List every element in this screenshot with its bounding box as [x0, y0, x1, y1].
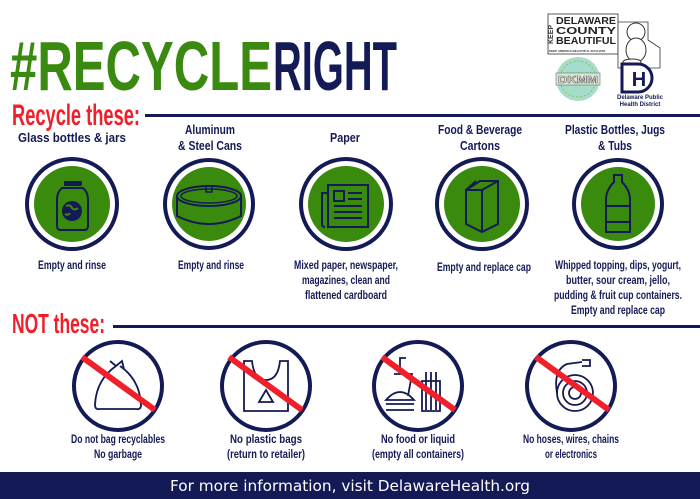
logo: Keep Delaware County Beautiful: KEEP AMERICA BEAUTIFUL AFFILIATE: [549, 49, 605, 53]
item: cans: & Steel Cans: [178, 138, 242, 153]
heading: NOT these: NOT these:: [12, 308, 105, 339]
item: cans: Empty and rinse: [178, 258, 244, 272]
title: #RECYCLE: [10, 27, 272, 105]
item: paper: Mixed paper, newspaper,: [294, 258, 398, 272]
logo: Delaware Public Health District: Health District: [620, 102, 660, 108]
item: plastic: & Tubs: [598, 138, 632, 153]
item: cartons: Empty and replace cap: [437, 260, 531, 274]
item: no hoses: or electronics: [545, 447, 597, 461]
item: no bagging: Do not bag recyclables: [71, 432, 165, 446]
item: no hoses: [523, 342, 619, 461]
item: cartons: [437, 122, 531, 274]
item: glass: Empty and rinse: [38, 258, 106, 272]
footer: [0, 472, 700, 499]
heading: Recycle these: Recycle these:: [12, 99, 140, 132]
logo: Delaware Public Health District: H: [632, 69, 646, 91]
item: no bagging: No garbage: [94, 447, 142, 461]
logo: DKMM: [556, 57, 600, 101]
item: no hoses: No hoses, wires, chains: [523, 432, 619, 446]
logo: Keep Delaware County Beautiful: DELAWARE: [556, 16, 616, 27]
item: no plastic bags: (return to retailer): [227, 447, 305, 461]
item: cartons: Food & Beverage: [438, 122, 522, 137]
item: plastic: Empty and replace cap: [571, 303, 665, 317]
heading: Recycle these: [12, 99, 700, 132]
logo: Delaware Public Health District: Delaware Public: [617, 95, 664, 101]
item: no plastic bags: No plastic bags: [230, 432, 302, 446]
item: glass: [18, 130, 126, 272]
recycle items: [18, 122, 682, 317]
item: cans: Aluminum: [185, 122, 235, 137]
logo: Keep Delaware County Beautiful: COUNTY: [556, 26, 616, 37]
item: paper: flattened cardboard: [305, 288, 387, 302]
not items: [71, 342, 619, 461]
item: glass: Glass bottles & jars: [18, 130, 126, 145]
item: no food or liquid: (empty all containers): [372, 447, 464, 461]
item: no food or liquid: No food or liquid: [381, 432, 455, 446]
item: cartons: Cartons: [460, 138, 500, 153]
heading: NOT these: [12, 308, 700, 339]
title: RIGHT: [273, 27, 397, 105]
item: plastic: Plastic Bottles, Jugs: [565, 122, 665, 137]
item: paper: magazines, clean and: [302, 273, 390, 287]
logo: Keep Delaware County Beautiful: [548, 14, 660, 68]
logo: Keep Delaware County Beautiful: BEAUTIFUL: [556, 36, 616, 47]
item: paper: Paper: [330, 130, 360, 145]
logo: Keep Delaware County Beautiful: KEEP: [548, 25, 555, 44]
item: no food or liquid: [372, 342, 464, 461]
footer: For more information, visit DelawareHealth.org: [170, 477, 530, 495]
item: no bagging: [71, 342, 165, 461]
item: paper: [294, 130, 398, 302]
logo: Delaware Public Health District: [617, 64, 664, 108]
item: no plastic bags: [222, 342, 310, 461]
logo: DKMM: DKMM: [558, 75, 598, 86]
item: plastic: [554, 122, 682, 317]
item: cans: [165, 122, 253, 272]
